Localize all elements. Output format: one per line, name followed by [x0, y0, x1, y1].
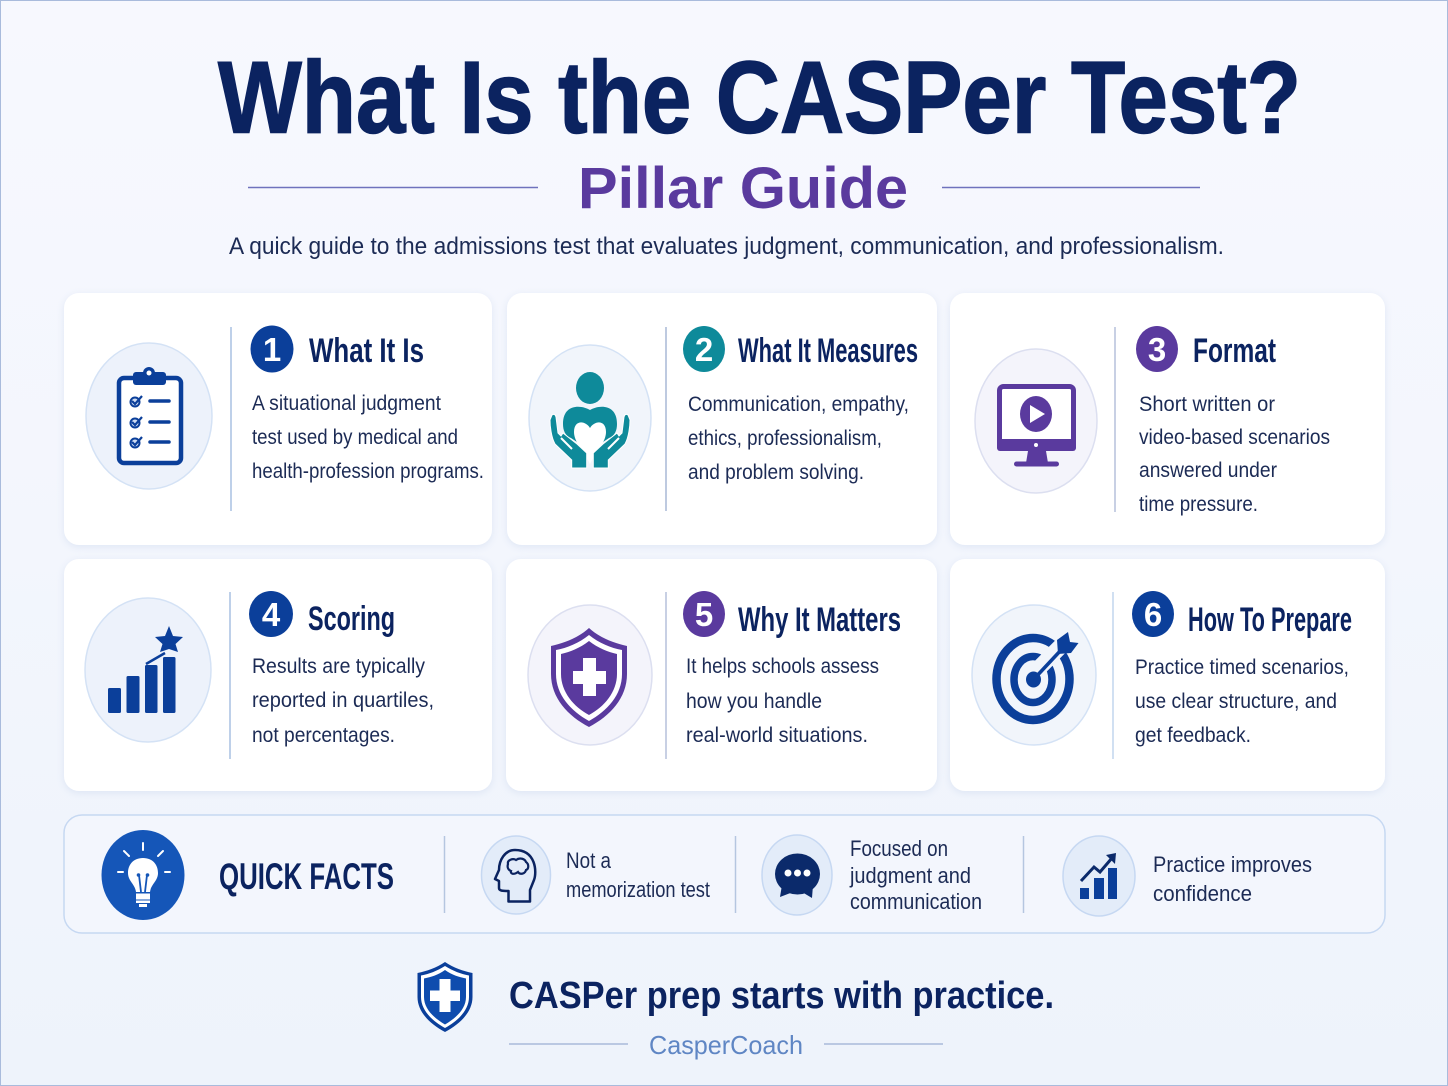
footer brand: CasperCoach: CasperCoach [649, 1030, 803, 1060]
body text [1135, 655, 1349, 747]
number badge 2: 2 [695, 331, 713, 368]
icon: video monitor [975, 349, 1097, 493]
fact: not a memorization test: memorization test [566, 877, 710, 902]
number badge 5 [683, 591, 725, 637]
fact: focused on judgment and communication: communication [850, 889, 982, 914]
panel: quick facts [64, 815, 1385, 933]
body text: ethics, professionalism, [688, 426, 882, 450]
body text: A situational judgment [252, 391, 441, 415]
icon: chat bubble [762, 835, 832, 915]
body text: Short written or [1139, 392, 1275, 416]
icon: target with arrow [972, 605, 1096, 745]
body text [252, 654, 434, 747]
number badge 6: 6 [1144, 596, 1162, 633]
body text: Communication, empathy, [688, 392, 909, 416]
panel: 2 What It Measures [507, 293, 937, 545]
body text: use clear structure, and [1135, 689, 1337, 713]
body text: how you handle [686, 689, 822, 713]
intro text: A quick guide to the admissions test that evaluates judgment, communication, and professionalism. [229, 233, 1224, 260]
body text: health-profession programs. [252, 459, 484, 483]
subtitle: Pillar Guide: Pillar Guide [578, 156, 908, 221]
icon: caring hands and heart [529, 345, 651, 491]
icon: footer shield [418, 962, 472, 1032]
panel: 6 How To Prepare [950, 559, 1385, 791]
fact: practice improves confidence [1153, 852, 1312, 906]
fact: not a memorization test: Not a [566, 848, 612, 873]
body text: test used by medical and [252, 425, 458, 449]
body text: Practice timed scenarios, [1135, 655, 1349, 679]
body text [1139, 392, 1330, 516]
heading: Scoring [308, 600, 395, 638]
icon: growth chart [1063, 836, 1135, 916]
body text: reported in quartiles, [252, 688, 434, 712]
number badge 1: 1 [263, 331, 281, 368]
panel: 5 Why It Matters [506, 559, 937, 791]
fact: focused on judgment and communication: judgment and [849, 863, 971, 888]
body text [252, 391, 484, 483]
panel: 1 What It Is [64, 293, 492, 545]
body text: video-based scenarios [1139, 425, 1330, 449]
icon: shield with cross [528, 605, 652, 745]
body text: It helps schools assess [686, 654, 879, 678]
number badge 6 [1132, 591, 1174, 637]
icon: rising bars and star [85, 598, 211, 742]
number badge 5: 5 [695, 596, 713, 633]
body text: real-world situations. [686, 723, 868, 747]
icon: clipboard [86, 343, 212, 489]
icon: head with brain [482, 836, 550, 914]
heading: Why It Matters [738, 601, 901, 639]
number badge 4 [249, 591, 293, 637]
heading: What It Is [309, 332, 424, 370]
fact: focused on judgment and communication: Focused on [850, 836, 948, 861]
body text: time pressure. [1139, 492, 1258, 516]
body text: get feedback. [1135, 723, 1251, 747]
number badge 3 [1136, 326, 1178, 372]
fact: practice improves confidence: confidence [1153, 881, 1252, 906]
number badge 1 [250, 326, 294, 372]
title: What Is the CASPer Test? [218, 40, 1301, 154]
panel: 3 Format [950, 293, 1385, 545]
number badge 3: 3 [1148, 331, 1166, 368]
fact: practice improves confidence: Practice improves [1153, 852, 1312, 877]
body text [686, 654, 879, 747]
heading: What It Measures [738, 332, 918, 370]
fact: focused on judgment and communication [849, 836, 982, 914]
heading: How To Prepare [1188, 601, 1352, 639]
panel: 4 Scoring [64, 559, 492, 791]
heading: quick facts: QUICK FACTS [219, 856, 394, 897]
body text: and problem solving. [688, 460, 864, 484]
body text: Results are typically [252, 654, 425, 678]
number badge 2 [683, 326, 725, 372]
body text [688, 392, 909, 484]
fact: not a memorization test [566, 848, 710, 902]
number badge 4: 4 [262, 596, 281, 633]
footer tagline: CASPer prep starts with practice. [509, 975, 1054, 1017]
heading: Format [1193, 332, 1276, 370]
body text: not percentages. [252, 723, 395, 747]
icon: light bulb [102, 830, 184, 920]
body text: answered under [1139, 458, 1277, 482]
